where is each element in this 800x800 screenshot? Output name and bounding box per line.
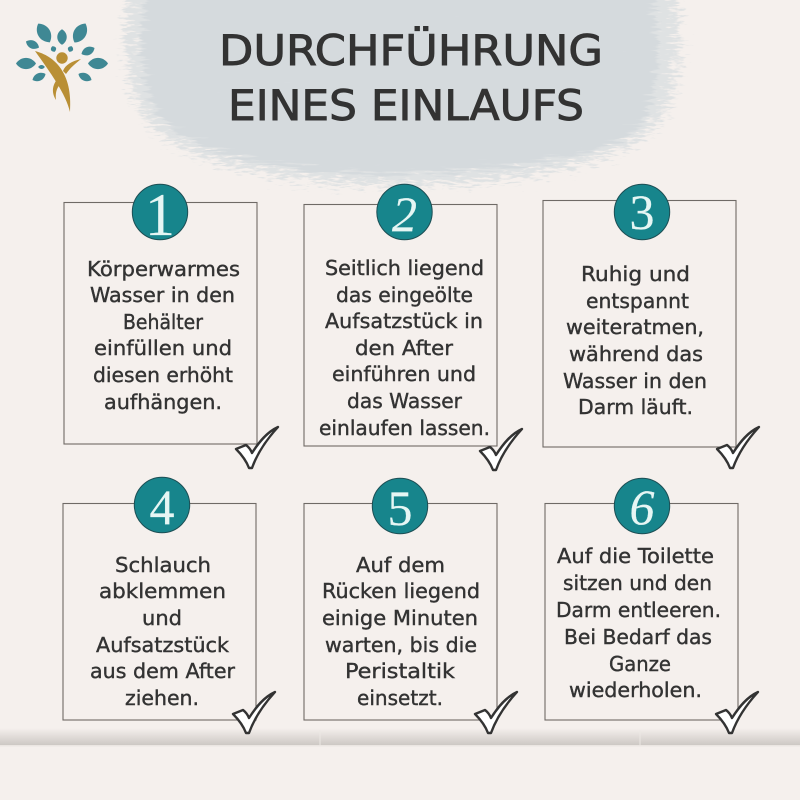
panel: step 5 bbox=[304, 478, 517, 733]
step 2 number badge: 2 bbox=[392, 186, 417, 242]
step 2 text: das eingeölte bbox=[336, 283, 473, 307]
step 3 text: Darm läuft. bbox=[578, 395, 693, 419]
step 3 frame bbox=[543, 200, 736, 447]
step 5 number badge bbox=[372, 478, 428, 536]
step 3 text: entspannt bbox=[586, 289, 689, 313]
step 4 text bbox=[90, 553, 236, 710]
step 1 text: Wasser in den bbox=[90, 283, 235, 307]
bottom shadow band bbox=[0, 728, 800, 746]
step 6 text: sitzen und den bbox=[563, 571, 712, 595]
step 4 number badge bbox=[134, 477, 190, 535]
step 3 text: während das bbox=[569, 342, 703, 366]
step 1 text: diesen erhöht bbox=[93, 363, 233, 387]
logo figure bbox=[35, 51, 81, 112]
step 4 number badge: 4 bbox=[150, 479, 174, 535]
step 2 number badge bbox=[377, 184, 432, 242]
logo leaves bbox=[16, 20, 108, 84]
step 4 frame bbox=[63, 504, 256, 720]
step 6 text: Darm entleeren. bbox=[556, 598, 721, 622]
step 3 text: Wasser in den bbox=[563, 369, 707, 393]
logo: tree person bbox=[16, 20, 108, 112]
step 5 text: warten, bis die bbox=[325, 633, 477, 657]
step 4 text: abklemmen bbox=[99, 579, 226, 603]
step 1 check mark bbox=[236, 427, 278, 468]
step 6 frame bbox=[545, 504, 738, 720]
step 6 number badge bbox=[614, 478, 670, 535]
brush stroke behind title bbox=[140, 0, 658, 176]
step 4 text: ziehen. bbox=[125, 686, 199, 710]
step 1 number badge bbox=[132, 182, 188, 248]
step 2 text: einlaufen lassen. bbox=[319, 416, 490, 440]
step 3 text: weiteratmen, bbox=[566, 315, 704, 339]
step 1 text: Behälter bbox=[123, 310, 204, 334]
panel: step 4 bbox=[63, 477, 275, 733]
step 6 text: Auf die Toilette bbox=[557, 544, 714, 568]
step 5 frame bbox=[304, 504, 497, 720]
step 1 text: einfüllen und bbox=[94, 336, 232, 360]
panel: step 6 bbox=[545, 478, 758, 733]
step 1 text: Körperwarmes bbox=[87, 257, 240, 281]
step 1 frame bbox=[64, 202, 257, 444]
step 6 text bbox=[556, 544, 721, 702]
panel: step 2 bbox=[304, 184, 522, 470]
step 1 number badge: 1 bbox=[145, 182, 175, 248]
title bbox=[219, 25, 603, 130]
step 5 text: Auf dem bbox=[356, 553, 445, 577]
step 3 check mark bbox=[717, 427, 759, 468]
step 5 text: Rücken liegend bbox=[322, 579, 480, 603]
step 2 text: einführen und bbox=[332, 362, 476, 386]
title: DURCHFÜHRUNG bbox=[219, 25, 603, 75]
step 2 frame bbox=[304, 204, 497, 446]
step 2 text bbox=[319, 256, 490, 440]
title: EINES EINLAUFS bbox=[228, 81, 584, 130]
step 3 text: Ruhig und bbox=[581, 262, 690, 286]
step 5 text: Peristaltik bbox=[345, 659, 455, 683]
step 3 text bbox=[563, 262, 707, 419]
step 4 text: Aufsatzstück bbox=[96, 633, 229, 657]
step 6 text: Ganze bbox=[609, 652, 671, 676]
step 6 number badge: 6 bbox=[630, 479, 654, 535]
step 6 text: Bei Bedarf das bbox=[564, 625, 712, 649]
step 2 text: Seitlich liegend bbox=[325, 256, 484, 280]
step 2 text: das Wasser bbox=[347, 389, 463, 413]
step 5 text: einige Minuten bbox=[322, 606, 478, 630]
step 6 text: wiederholen. bbox=[569, 678, 702, 702]
step 5 number badge: 5 bbox=[388, 480, 412, 536]
step 2 text: den After bbox=[355, 336, 454, 360]
step 1 text bbox=[87, 257, 240, 414]
step 5 check mark bbox=[475, 692, 517, 733]
step 5 text bbox=[322, 553, 480, 710]
step 2 check mark bbox=[480, 429, 522, 470]
panel: step 1 bbox=[64, 182, 278, 468]
panel: step 3 bbox=[543, 184, 759, 468]
step 3 number badge: 3 bbox=[630, 184, 654, 240]
step 4 text: und bbox=[142, 606, 182, 630]
brush fringe bbox=[119, 0, 686, 192]
step 1 text: aufhängen. bbox=[104, 390, 222, 414]
step 4 check mark bbox=[233, 692, 275, 733]
step 5 text: einsetzt. bbox=[357, 686, 443, 710]
step 6 check mark bbox=[716, 692, 758, 733]
step 4 text: Schlauch bbox=[115, 553, 211, 577]
step 2 text: Aufsatzstück in bbox=[325, 309, 483, 333]
step 4 text: aus dem After bbox=[90, 659, 236, 683]
step 3 number badge bbox=[614, 184, 670, 240]
